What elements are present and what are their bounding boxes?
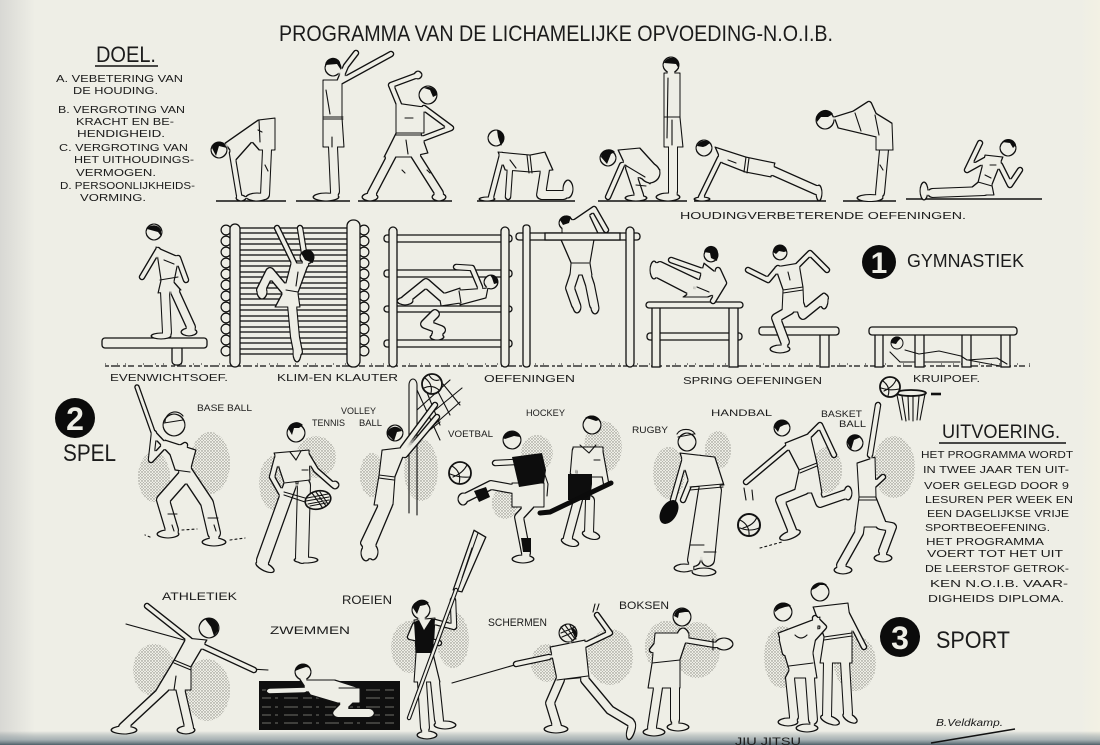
labels: spel: VOETBAL [448, 429, 493, 439]
figure: bent forward, hands on hips [816, 104, 893, 202]
figure: rower [409, 530, 486, 739]
panel: spel [55, 374, 941, 576]
apparatus: wall bars [384, 227, 512, 367]
stipple blobs: spel [138, 421, 915, 519]
figure: runner [748, 244, 828, 353]
text: uitvoering body: HET PROGRAMMA [926, 537, 1044, 548]
signature [931, 718, 1015, 743]
figure: on all fours [479, 130, 573, 201]
section badge: 2 spel: SPEL [63, 440, 116, 467]
figure: handbal [738, 420, 852, 548]
labels: spel: HOCKEY [526, 408, 565, 418]
text: doel list: A. VEBETERING VAN [56, 74, 183, 85]
text: uitvoering body: KEN N.O.I.B. VAAR- [930, 579, 1068, 590]
labels: gymnastiek apparatus: KRUIPOEF. [913, 374, 980, 385]
labels: gymnastiek apparatus: EVENWICHTSOEF. [110, 373, 228, 384]
labels: spel: TENNIS [312, 418, 345, 428]
figure: hanging under bars [397, 267, 498, 340]
panel: sport [111, 530, 1010, 745]
title: PROGRAMMA VAN DE LICHAMELIJKE OPVOEDING-N.O.I.B. [279, 21, 833, 46]
text: doel list: HET UITHOUDINGS- [74, 155, 194, 166]
labels: gymnastiek apparatus: KLIM-EN KLAUTER [277, 373, 398, 384]
text: doel list: C. VERGROTING VAN [59, 143, 188, 154]
text: doel list: KRACHT EN BE- [76, 117, 174, 128]
water block [259, 681, 400, 730]
stipple blobs: sport [133, 612, 876, 721]
labels: sport: BOKSEN [619, 600, 669, 612]
text: uitvoering body [921, 450, 1073, 605]
panel: uitvoering [921, 422, 1073, 605]
heading: doel: DOEL. [96, 42, 156, 67]
section badge: 1 gymnastiek: GYMNASTIEK [907, 251, 1024, 271]
labels: spel [197, 403, 866, 439]
section badge: 2 spel [55, 398, 116, 467]
figure: javelin thrower [111, 606, 268, 734]
text: uitvoering body: DIGHEIDS DIPLOMA. [928, 594, 1064, 605]
labels: sport: ATHLETIEK [162, 591, 238, 603]
apparatus: horizontal bar [516, 225, 640, 367]
icon: football [449, 462, 471, 484]
section badge: 3 sport: SPORT [936, 627, 1010, 654]
figure: jiu jitsu pair [774, 583, 864, 732]
apparatus: low beam [759, 327, 839, 367]
figure: tennis [254, 422, 339, 575]
figure: fencer [452, 604, 637, 741]
labels: spel: BASE BALL [197, 403, 252, 413]
apparatus: crawl frame [869, 327, 1017, 367]
labels: spel: BASKET [821, 409, 863, 419]
text: doel list [56, 74, 195, 204]
labels: gymnastiek apparatus: OEFENINGEN [484, 374, 575, 385]
section badge: 1 gymnastiek [862, 245, 1024, 280]
apparatus: vaulting bars [646, 302, 743, 367]
apparatus: climbing wall [226, 220, 364, 367]
text: uitvoering body: VOER GELEGD DOOR 9 [924, 481, 1070, 492]
text: uitvoering body: VOERT TOT HET UIT [927, 549, 1063, 560]
figure: baseball [137, 387, 245, 546]
section badge: 3 sport [880, 617, 1010, 657]
figure: climber [257, 228, 314, 362]
icon: basketball hoop and ball [880, 377, 941, 421]
ground lines [216, 199, 1042, 201]
icon: volleyball [422, 374, 442, 394]
labels: spel: HANDBAL [711, 408, 772, 418]
figure: toe touch [211, 118, 275, 201]
icon: handball [738, 514, 760, 536]
figure: swimmer [259, 664, 400, 730]
text: doel list: VERMOGEN. [76, 168, 156, 179]
grass line [105, 364, 1030, 366]
figure: rugby [656, 429, 724, 576]
text: doel list: B. VERGROTING VAN [58, 105, 185, 116]
labels: gymnastiek apparatus [110, 373, 980, 387]
labels: sport: SCHERMEN [488, 617, 547, 629]
panel: houdingverbeterende oefeningen figures [211, 53, 1042, 202]
text: doel list: VORMING. [80, 193, 146, 204]
text: doel list: DE HOUDING. [73, 86, 158, 97]
text: uitvoering body: LESUREN PER WEEK EN [925, 495, 1073, 506]
labels: gymnastiek apparatus: SPRING OEFENINGEN [683, 376, 822, 387]
figure: voetbal [449, 431, 548, 563]
labels: sport: ZWEMMEN [270, 625, 350, 637]
section badge: 1 gymnastiek: 1 [871, 247, 887, 280]
labels: spel: VOLLEY [341, 406, 376, 416]
text: uitvoering body: HET PROGRAMMA WORDT [921, 450, 1073, 461]
figure: arms up [313, 53, 391, 201]
figure: volleyball [361, 374, 462, 561]
signature: B.Veldkamp. [936, 718, 1003, 729]
figure: side bend [362, 71, 451, 201]
section badge: 2 spel: 2 [66, 401, 84, 437]
figure: hockey [540, 416, 611, 548]
apparatus: balance beam [102, 338, 207, 365]
text: doel list: D. PERSOONLIJKHEIDS- [60, 181, 195, 192]
icon: rugby ball [656, 497, 682, 527]
figure: push-up [694, 140, 822, 201]
figure: basketball [834, 377, 941, 574]
figure: boxer [643, 608, 733, 736]
text: doel list: HENDIGHEID. [77, 129, 165, 140]
figure: standing straight [656, 57, 683, 201]
labels: sport: ROEIEN [342, 593, 392, 607]
section badge: 3 sport: 3 [891, 620, 909, 656]
caption: houdingverbeterende oefeningen: HOUDINGVERBETERENDE OEFENINGEN. [680, 211, 966, 222]
panel: doel [56, 42, 195, 204]
text: uitvoering body: IN TWEE JAAR TEN UIT- [923, 465, 1069, 476]
figure: balancing [142, 224, 197, 339]
figure: crouch [600, 148, 660, 201]
net post and net [409, 379, 462, 515]
heading: uitvoering: UITVOERING. [942, 422, 1060, 443]
figure: vaulting [650, 246, 724, 301]
text: uitvoering body: EEN DAGELIJKSE VRIJE [927, 509, 1069, 520]
figure: crawler [890, 336, 1007, 366]
labels: spel: RUGBY [632, 425, 668, 435]
labels: spel: BALL [359, 418, 382, 428]
labels: spel: BALL [839, 419, 866, 429]
text: uitvoering body: DE LEERSTOF GETROK- [925, 564, 1069, 575]
panel: gymnastiek apparatus and figures [102, 209, 1030, 387]
text: uitvoering body: SPORTBEOEFENING. [925, 523, 1050, 534]
labels: sport [162, 591, 801, 745]
figure: sit-up [920, 139, 1020, 200]
figure: hanging over bar [545, 209, 620, 314]
